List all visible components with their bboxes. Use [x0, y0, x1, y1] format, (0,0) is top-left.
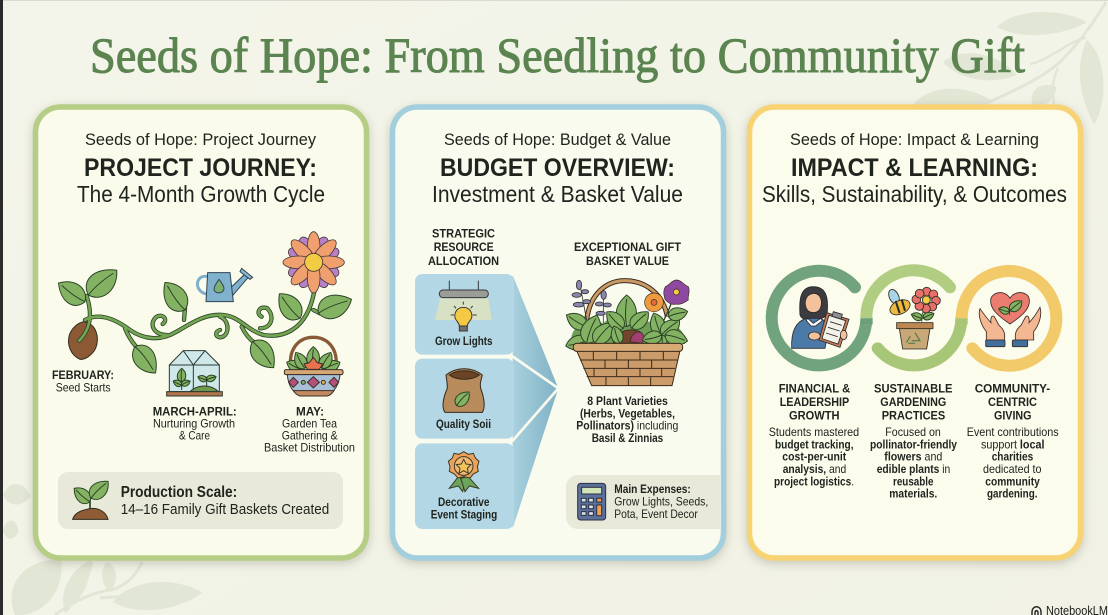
heading: budget overview: Seeds of Hope: Budget & Value [444, 130, 671, 149]
column: financial and leadership growth: budget tracking, [775, 437, 854, 451]
heading: impact and learning: Skills, Sustainability, & Outcomes [762, 181, 1067, 207]
column: sustainable gardening practices: reusable [893, 474, 934, 488]
heading: strategic resource allocation [428, 227, 499, 268]
icon: flower [283, 232, 344, 293]
background leaves: bottom left [0, 484, 204, 615]
heading: project journey: Seeds of Hope: Project Journey [85, 130, 316, 149]
callout: main expenses [566, 475, 720, 529]
heading: budget overview [432, 130, 683, 207]
vine timeline illustration [52, 232, 356, 396]
connected rings [772, 270, 1056, 366]
column: financial and leadership growth: FINANCIAL & [779, 382, 850, 396]
column: financial and leadership growth: project logistics. [774, 474, 854, 488]
column: sustainable gardening practices: SUSTAINABLE [874, 382, 952, 396]
text: plant varieties: (Herbs, Vegetables, [580, 406, 675, 420]
label: may: Basket Distribution [264, 441, 355, 455]
heading: impact and learning: IMPACT & LEARNING: [791, 154, 1038, 182]
column: financial and leadership growth [769, 382, 859, 488]
column: community-centric giving: gardening. [987, 486, 1038, 500]
heading: budget overview: Investment & Basket Value [432, 181, 683, 207]
column: community-centric giving: charities [992, 450, 1033, 464]
text: plant varieties [576, 394, 678, 445]
callout: production scale [58, 472, 343, 529]
column: community-centric giving: GIVING [994, 408, 1032, 422]
icon: soil bag [443, 369, 484, 412]
column: sustainable gardening practices [870, 382, 957, 500]
heading: impact and learning: Seeds of Hope: Impact & Learning [790, 130, 1039, 149]
column: sustainable gardening practices: materials. [889, 486, 937, 500]
label: march-april: MARCH-APRIL: [153, 405, 237, 419]
label: may: Garden Tea [282, 416, 337, 430]
label: march-april [153, 405, 237, 442]
heading: strategic resource allocation: STRATEGIC [432, 227, 495, 241]
callout: production scale: Production Scale: [121, 484, 237, 501]
resource funnel [415, 274, 558, 529]
label: quality soil: Quality Soii [436, 417, 491, 431]
column: financial and leadership growth: Students mastered [769, 425, 859, 439]
label: may [264, 405, 355, 455]
left screen edge [0, 0, 3, 615]
icon: basket [284, 337, 343, 396]
label: may: Gathering & [282, 429, 338, 443]
panel: budget overview [392, 107, 724, 558]
column: sustainable gardening practices: Focused on [885, 425, 941, 439]
column: community-centric giving: COMMUNITY- [975, 382, 1050, 396]
text: plant varieties: 8 Plant Varieties [587, 394, 668, 408]
heading: exceptional gift basket value: BASKET VALUE [586, 254, 669, 268]
icon: greenhouse [167, 351, 222, 396]
heading: strategic resource allocation: ALLOCATION [428, 254, 499, 268]
column: sustainable gardening practices: GARDENING [880, 395, 946, 409]
text: plant varieties: Basil & Zinnias [592, 431, 663, 445]
icon: grow light [435, 281, 492, 331]
label: february: FEBRUARY: [52, 368, 114, 382]
heading: project journey [77, 130, 325, 207]
icon: student with clipboard [792, 287, 849, 348]
column: sustainable gardening practices: PRACTICES [882, 408, 945, 422]
vine [79, 293, 320, 347]
column: community-centric giving: CENTRIC [988, 395, 1037, 409]
heading: project journey: The 4-Month Growth Cycle [77, 181, 325, 207]
column: sustainable gardening practices: flowers and [884, 450, 942, 464]
label: february: Seed Starts [56, 380, 111, 394]
icon: bee and potted flower [887, 287, 940, 349]
leaves on vine [52, 261, 356, 379]
column: community-centric giving: community [985, 474, 1040, 488]
column: community-centric giving: Event contributions [967, 425, 1059, 439]
callout: production scale: 14–16 Family Gift Baskets Created [121, 502, 329, 518]
background leaves: top right [914, 2, 1107, 126]
heading: strategic resource allocation: RESOURCE [434, 240, 494, 254]
heading: budget overview: BUDGET OVERVIEW: [440, 154, 675, 182]
label: decorative event staging [431, 495, 497, 522]
icon: seed [69, 322, 97, 359]
icon: award badge [448, 452, 479, 492]
callout: main expenses: Pota, Event Decor [614, 507, 698, 521]
column: community-centric giving: support local [981, 437, 1044, 451]
icon: caring hands with heart [979, 293, 1041, 347]
icon: calculator [578, 483, 606, 520]
heading: exceptional gift basket value [574, 240, 681, 268]
icon: watering can [197, 268, 253, 302]
callout: main expenses: Grow Lights, Seeds, [614, 495, 708, 509]
callout: main expenses: Main Expenses: [614, 482, 691, 496]
column: sustainable gardening practices: pollinator-friendly [870, 437, 957, 451]
column: financial and leadership growth: GROWTH [789, 408, 840, 422]
label: decorative event staging: Decorative [438, 495, 490, 509]
column: sustainable gardening practices: edible plants in [877, 462, 950, 476]
label: decorative event staging: Event Staging [431, 508, 497, 522]
label: february [52, 368, 114, 394]
label: march-april: Nurturing Growth [153, 416, 235, 430]
label: may: MAY: [296, 405, 324, 419]
text: plant varieties: Pollinators) including [576, 419, 678, 433]
title: Seeds of Hope: From Seedling to Community Gift [90, 27, 1025, 83]
heading: exceptional gift basket value: EXCEPTIONAL GIFT [574, 240, 681, 254]
column: financial and leadership growth: LEADERSHIP [780, 395, 849, 409]
column: financial and leadership growth: analysis, and [783, 462, 846, 476]
panel: project journey [36, 107, 366, 558]
heading: project journey: PROJECT JOURNEY: [84, 154, 317, 182]
label: march-april: & Care [179, 428, 210, 442]
column: community-centric giving: dedicated to [983, 462, 1042, 476]
icon: plant basket [563, 280, 690, 386]
label: grow lights: Grow Lights [435, 334, 493, 348]
column: community-centric giving [967, 382, 1059, 500]
panel: impact and learning [750, 107, 1080, 558]
heading: impact and learning [762, 130, 1067, 207]
icon: sprout [70, 476, 113, 519]
column: financial and leadership growth: cost-per-unit [782, 450, 846, 464]
